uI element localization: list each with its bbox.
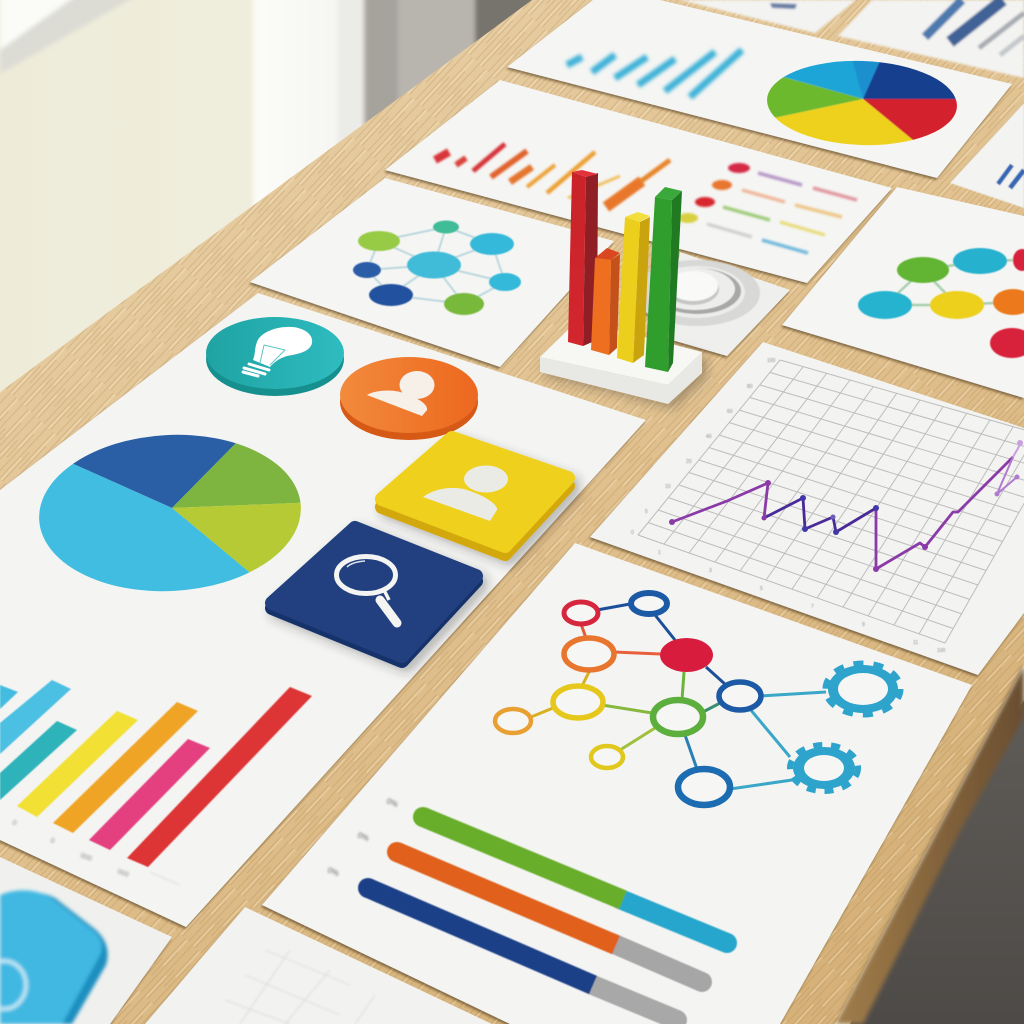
- network links: [531, 604, 826, 789]
- network links and nodes: [353, 220, 521, 315]
- table side edge: [835, 665, 1024, 1024]
- chart axis tick labels: 7: [811, 604, 814, 610]
- chart axis tick labels: 0: [631, 530, 634, 536]
- axis labels: 000: [79, 852, 93, 863]
- chart axis tick labels: 60: [727, 409, 733, 415]
- large pie chart: [39, 434, 301, 592]
- chart axis tick labels: 1: [658, 550, 661, 556]
- pie chart six slices: [767, 60, 957, 146]
- legend dots and lines: [678, 163, 857, 253]
- icon: person on yellow square: [382, 438, 568, 554]
- card: network diagram: [250, 178, 614, 367]
- progress bar labels: 0%: [326, 866, 340, 878]
- progress bar labels: [326, 797, 399, 878]
- axis labels: [11, 819, 180, 885]
- card: red and orange bars with legend: [385, 80, 892, 283]
- base platform: [540, 320, 702, 404]
- grid: [638, 360, 1024, 643]
- purple line series: [669, 440, 1023, 572]
- card: far right small blue bars: [950, 103, 1024, 208]
- gauge rings: [634, 260, 760, 326]
- chart axis tick labels: 100: [767, 358, 776, 364]
- bar chart: six coloured bars: [0, 680, 312, 867]
- progress bar labels: 0%: [385, 797, 399, 809]
- network links and nodes: [858, 248, 1024, 358]
- axis labels: 0: [49, 837, 55, 845]
- 3D bar chart model: [540, 170, 702, 404]
- chart axis tick labels: 11: [913, 640, 918, 646]
- chart axis tick labels: [631, 358, 946, 654]
- yellow bar: [617, 212, 650, 363]
- chart axis tick labels: 100: [937, 648, 946, 654]
- card: gauge: [634, 252, 790, 356]
- faint grid lines: [225, 950, 375, 1024]
- axis labels: 0: [11, 819, 17, 827]
- icon: gear upper: [826, 664, 900, 714]
- chart axis tick labels: 10: [665, 484, 671, 490]
- chart axis tick labels: 5: [760, 586, 763, 592]
- orange bar: [591, 248, 620, 355]
- card: pie chart and blue bars: [507, 0, 1012, 178]
- icon: blue rounded tile: [0, 890, 108, 1024]
- icon: magnifier on navy square: [272, 528, 476, 661]
- chart axis tick labels: 9: [862, 622, 865, 628]
- card: bottom left with blue icon: [0, 857, 172, 1024]
- progress bars: [358, 807, 727, 1020]
- icon: person on orange disc: [340, 357, 478, 440]
- chart axis tick labels: 80: [747, 384, 753, 390]
- orange bar chart: [435, 144, 670, 207]
- card: top centre: [680, 0, 856, 33]
- chart axis tick labels: 20: [686, 459, 692, 465]
- green bar: [645, 187, 682, 372]
- chart axis tick labels: 3: [709, 568, 712, 574]
- icon: lightbulb on teal disc: [206, 317, 344, 396]
- chart axis tick labels: 40: [706, 434, 712, 440]
- card: top right with blue bars: [838, 0, 1024, 78]
- chart axis tick labels: 5: [645, 509, 648, 515]
- icon: gear lower: [790, 745, 858, 791]
- card: line chart with grid: [590, 342, 1024, 675]
- card: bottom faint grid: [145, 907, 492, 1024]
- network nodes: [495, 593, 761, 805]
- progress bar labels: 0%: [356, 831, 370, 843]
- red bar: [568, 170, 598, 346]
- card: network with gears and progress bars: [262, 543, 972, 1024]
- card: main with pie, icons and bars: [0, 293, 646, 927]
- card: right network diagram: [782, 187, 1024, 398]
- floor at bottom right: [850, 700, 1024, 1024]
- blue bar chart: [567, 50, 742, 97]
- axis labels: 000: [116, 868, 130, 879]
